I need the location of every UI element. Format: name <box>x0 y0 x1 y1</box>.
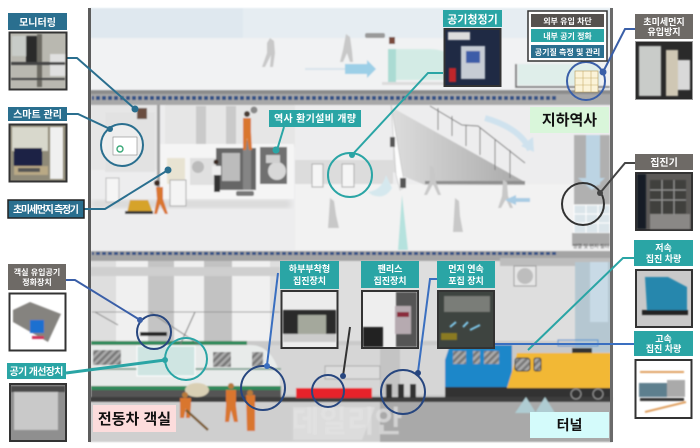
panel: monitoring <box>8 13 67 90</box>
label: facility ventilation <box>269 110 361 154</box>
panel: underbody collector: 집진장치 <box>293 275 326 286</box>
locomotives <box>445 340 611 413</box>
photo: dust collector <box>636 173 692 230</box>
photo: air purifier <box>444 29 500 86</box>
legend box: 공기질 측정 및 관리 <box>535 47 600 57</box>
panel: air improvement device <box>7 363 66 441</box>
photo: blue vehicle <box>636 270 692 327</box>
panel: monitoring: 모니터링 <box>19 17 56 29</box>
upper floor mezzanine and stairs <box>368 104 525 250</box>
panel: ultrafine dust inflow prevention <box>635 14 693 100</box>
legend box <box>528 11 607 61</box>
panel: low speed dust collection vehicle <box>634 240 693 327</box>
panel: high speed dust collection vehicle: 고속 <box>655 334 672 344</box>
watermark: 데일리안 <box>292 406 402 439</box>
label: ultrafine dust meter: 초미세먼지 측정기 <box>13 203 79 216</box>
panel: high speed dust collection vehicle <box>634 331 693 418</box>
panel: continuous dust capture: 먼지 연속 <box>448 263 484 274</box>
panel: continuous dust capture: 포집 장치 <box>448 275 484 286</box>
panel: impeller collector <box>361 261 419 348</box>
blue air arrows <box>485 118 534 205</box>
panel: air purifier <box>443 10 502 86</box>
tunnel scene <box>90 251 612 442</box>
building walls <box>88 8 613 442</box>
panel: impeller collector: 팬리스 <box>378 264 402 274</box>
panel: underbody collector: 하부부착형 <box>289 263 330 274</box>
panel: dust collector: 집진기 <box>650 156 678 169</box>
photo: purifier diagram <box>10 294 66 350</box>
station right duct <box>572 135 610 250</box>
legend box: 외부 유입 차단 <box>543 16 592 26</box>
label: tunnel: 터널 <box>557 417 582 433</box>
label: train cabin <box>93 405 176 432</box>
panel: impeller collector: 집진장치 <box>373 275 407 286</box>
station right duct: 방열 및 먼지 필터 <box>573 243 609 250</box>
photo: platform train <box>362 291 418 348</box>
panel: dust collector <box>635 154 693 230</box>
panel: cabin intake air purifier: 정화장치 <box>22 277 52 287</box>
left concourse machinery <box>105 106 354 206</box>
fan <box>514 266 536 286</box>
panel: air purifier: 공기청정기 <box>447 12 498 26</box>
panel: smart management <box>8 107 67 182</box>
photo: device <box>10 384 66 441</box>
photo: tunnel capture <box>438 291 494 348</box>
label: ultrafine dust meter <box>8 200 84 218</box>
label: tunnel <box>530 412 609 438</box>
panel: ultrafine dust inflow prevention: 유입방지 <box>647 26 681 37</box>
panel: low speed dust collection vehicle: 저속 <box>655 242 672 253</box>
upper right glass canopy <box>515 64 610 88</box>
panel: underbody collector <box>280 261 339 348</box>
station scene <box>90 8 612 251</box>
panel: cabin intake air purifier: 객실 유입공기 <box>14 267 60 277</box>
upper floor glass entrance <box>305 33 472 85</box>
photo: filter racks <box>636 42 692 100</box>
photo: monitoring equipment <box>10 32 66 90</box>
panel: smart management: 스마트 관리 <box>13 108 62 121</box>
cleaning workers on track <box>180 383 255 431</box>
photo: vehicle diagram <box>636 360 692 418</box>
photo: underbody <box>282 291 338 348</box>
panel: ultrafine dust inflow prevention: 초미세먼지 <box>643 16 685 27</box>
floor <box>90 402 612 442</box>
red filter strips <box>296 366 416 398</box>
panel: continuous dust capture <box>437 261 495 348</box>
panel: cabin intake air purifier <box>8 264 66 350</box>
legend box: 내부 공기 정화 <box>543 31 592 41</box>
photo: control kiosk <box>10 124 66 182</box>
label: underground station: 지하역사 <box>542 112 597 129</box>
label: underground station <box>530 107 609 133</box>
panel: air improvement device: 공기 개선장치 <box>10 365 64 378</box>
workers and cleaning machine <box>125 111 252 214</box>
subway train <box>91 312 281 397</box>
connector lines and circles <box>66 29 635 414</box>
panel: high speed dust collection vehicle: 집진 차량 <box>646 343 682 354</box>
pedestrians <box>262 34 513 232</box>
label: train cabin: 전동차 객실 <box>98 411 171 428</box>
label: facility ventilation: 역사 환기설비 개량 <box>274 112 356 125</box>
panel: low speed dust collection vehicle: 집진 차량 <box>646 253 682 264</box>
